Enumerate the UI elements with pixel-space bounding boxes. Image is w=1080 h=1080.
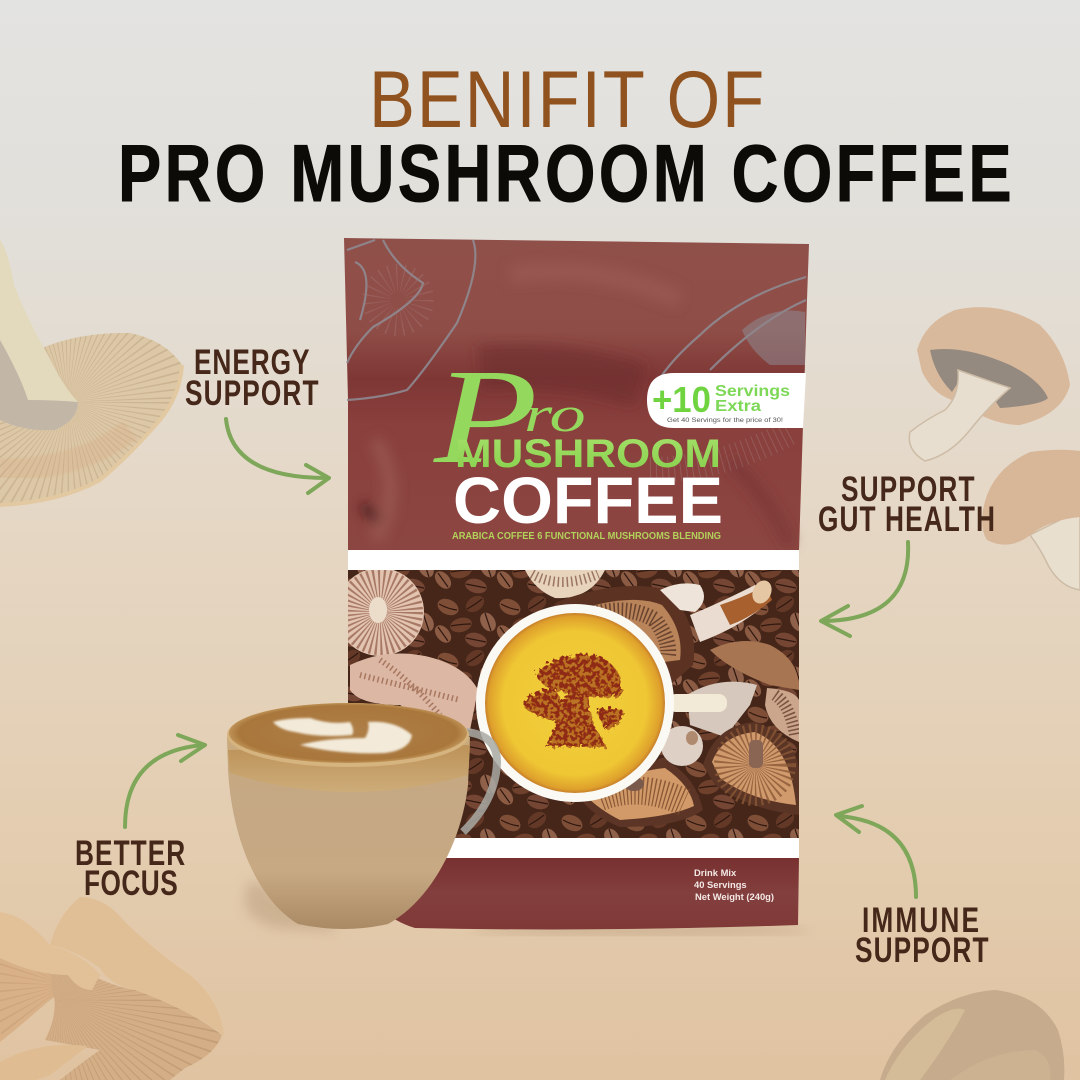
coffee surface [485,613,665,793]
rim highlight [227,703,469,767]
photo panel: beans and mushrooms [336,568,799,838]
bag lower band [349,857,799,929]
left mushroom edge [347,240,475,400]
gills [930,349,1048,408]
stem [1030,510,1080,590]
net weight details: 40 Servings [694,879,747,890]
bag folds [362,272,790,545]
large mushroom lower centre [578,760,703,827]
net weight details [694,867,774,902]
plus ten: +10 [652,379,711,420]
left lobe gills [0,930,70,1042]
right lines [652,277,806,392]
servings: Servings [715,383,790,400]
bag shadow [470,926,810,934]
title line 2: PRO MUSHROOM COFFEE [118,128,1012,219]
label: immune support [855,900,989,970]
right shaded area [742,310,805,365]
left stalk [347,240,375,320]
decorative mushroom: right upper [909,307,1070,461]
label: better focus [75,833,185,903]
cup body [227,737,470,929]
label: support gut health: SUPPORT [841,469,975,509]
line art mushrooms [347,240,806,470]
cup rim [476,604,674,802]
stalk shadow [0,340,78,430]
arrow: support gut health [821,542,908,636]
light patch [885,1009,965,1080]
glass handle [463,732,497,832]
latte art [273,718,412,753]
badge note: Get 40 Servings for the price of 30! [667,417,783,424]
arrow: energy support [226,419,329,493]
cup handle [668,694,727,712]
main gills [45,950,222,1080]
brand: pro script: ro [524,388,586,442]
large mushroom top [553,586,694,683]
stem edge [950,1050,1050,1080]
dome [880,990,1064,1080]
main cap [50,897,224,1035]
net weight details: Drink Mix [694,867,737,878]
label: immune support: IMMUNE [862,900,979,940]
cup ground shadow [245,880,340,932]
foreground cappuccino cup [227,703,497,932]
label: support gut health [818,469,995,539]
cap underside [0,333,182,505]
mushroom top centre [525,570,605,598]
tagline: ARABICA COFFEE 6 FUNCTIONAL MUSHROOMS BLENDING [452,531,721,542]
mushroom latte art [523,655,624,747]
product bag [336,238,809,929]
large mushroom lower right [703,722,799,815]
left lobe cap [0,912,100,990]
right-side mushrooms [660,577,799,742]
white mushroom under handle [661,726,703,766]
oyster mushroom left [350,653,478,730]
net weight details: Net Weight (240g) [695,891,774,902]
stalk [0,240,78,430]
servings badge [647,373,806,428]
arrow: immune support [836,806,916,897]
cap rim [0,365,182,505]
label: support gut health: GUT HEALTH [818,499,995,539]
white band lower [348,838,799,858]
bottom stem [0,1045,88,1080]
crema surface [229,703,467,763]
badge shape [647,373,806,428]
label: better focus: BETTER [75,833,185,873]
gills [0,340,130,470]
title [118,54,1012,219]
coffee beans background [348,570,799,838]
decorative mushroom: top left [0,240,182,505]
stem [909,370,1010,461]
extra: Extra [715,398,761,415]
brand: pro script: P [433,342,538,492]
decorative mushroom: bottom right [880,990,1064,1080]
arrow: better focus [125,735,205,827]
label: energy support: SUPPORT [185,373,319,413]
right gills [650,432,790,470]
white band upper [348,550,799,571]
brand: mushroom: MUSHROOM [455,432,721,476]
brand: pro script [433,342,586,492]
foam band [228,745,470,792]
title line 1: BENIFIT OF [369,54,764,144]
mushroom top left [348,570,424,656]
decorative mushroom: right lower [982,450,1080,590]
brand: coffee: COFFEE [453,463,723,537]
decorative mushroom: bottom left [0,897,224,1080]
label: better focus: FOCUS [84,863,178,903]
cap [917,307,1070,425]
golden latte cup [476,604,727,802]
left gills [376,278,420,322]
cap [982,450,1080,545]
left mushroom outline [347,240,423,363]
label: energy support [185,342,319,413]
bag upper body [344,238,809,550]
label: immune support: SUPPORT [855,930,989,970]
label: energy support: ENERGY [194,342,310,382]
